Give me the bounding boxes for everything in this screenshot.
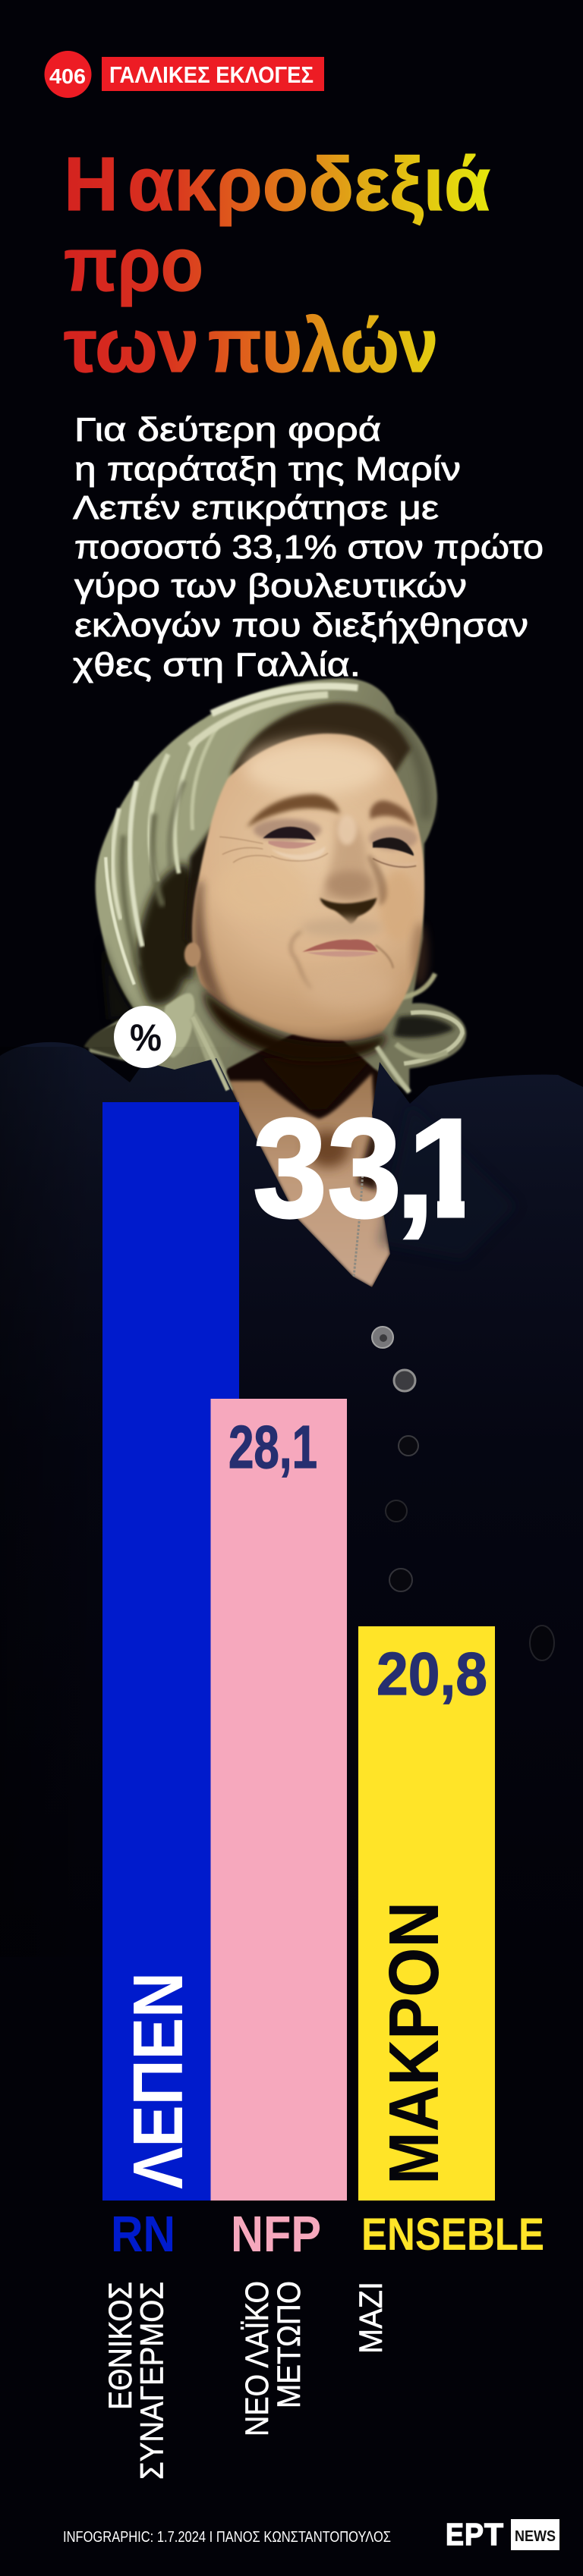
right eye — [373, 837, 414, 856]
ear — [184, 942, 200, 967]
bar: NFP: 28,1 — [228, 1413, 317, 1481]
footer credit: INFOGRAPHIC: 1.7.2024 Ι ΠΑΝΟΣ ΚΩΝΣΤΑΝΤΟΠΟΥΛΟΣ — [63, 2528, 391, 2546]
intro text: εκλογών που διεξήχθησαν — [74, 607, 528, 644]
chin light — [304, 964, 395, 1010]
party abbreviations: ENSEBLE — [361, 2209, 544, 2260]
left face shadow — [194, 881, 231, 1010]
logo: ERT news: Ρ — [465, 2517, 484, 2552]
header badge: issue number — [44, 51, 91, 98]
intro text: ποσοστό 33,1% στον πρώτο — [74, 529, 544, 566]
jaw shadow — [203, 990, 386, 1061]
value: 33,1 — [255, 1117, 465, 1239]
intro text: χθες στη Γαλλία. — [73, 646, 361, 683]
header badge: issue number: 406 — [49, 64, 86, 88]
right eyebrow — [370, 800, 414, 828]
value: 33,1: 33 — [253, 1090, 402, 1247]
intro text: Για δεύτερη φορά — [74, 411, 381, 448]
percent badge: % — [130, 1016, 162, 1059]
left eye socket — [254, 818, 321, 841]
right cheek — [380, 871, 418, 941]
title: των — [64, 303, 199, 388]
left eyebrow — [247, 794, 340, 828]
party full names: ΜΕΤΩΠΟ — [271, 2281, 307, 2408]
neck and chest skin — [216, 979, 395, 1290]
jacket — [0, 1042, 583, 2010]
party full names — [102, 2281, 389, 2480]
nose tip — [326, 871, 373, 898]
logo: ERT news: Ε — [446, 2517, 464, 2552]
hair mass — [84, 678, 466, 1092]
nose bridge and shadow — [320, 819, 378, 903]
title: πυλών — [208, 303, 438, 388]
logo: ERT news — [446, 2517, 559, 2552]
intro text: Λεπέν επικράτησε με — [73, 489, 439, 526]
nasolabial crease — [291, 931, 312, 988]
bar: Ensemble — [358, 1626, 495, 2201]
photo: Marine Le Pen portrait — [0, 678, 583, 2010]
bar: RN: ΛΕΠΕΝ — [118, 1972, 197, 2189]
face — [184, 734, 428, 1061]
party full names: ΝΕΟ ΛΑΪΚΟ — [239, 2281, 276, 2436]
value: 33,1: 1 — [408, 1090, 486, 1247]
party abbreviations: RN — [111, 2206, 175, 2263]
under-eye light — [271, 847, 326, 860]
title — [64, 142, 490, 388]
title: Η — [64, 142, 118, 227]
upper lip area — [301, 918, 383, 937]
logo: ERT news: Τ — [484, 2517, 503, 2552]
nostril shadow — [320, 898, 377, 924]
left cheek light — [214, 857, 307, 922]
hair and face, drawn in magnified coordinates — [84, 678, 466, 1092]
party full names: ΜΑΖΙ — [353, 2282, 389, 2354]
party abbreviations: NFP — [231, 2206, 321, 2263]
lips — [302, 940, 378, 952]
intro text — [73, 411, 544, 683]
header label: ΓΑΛΛΙΚΕΣ ΕΚΛΟΓΕΣ — [109, 61, 314, 88]
logo: ERT news: NEWS — [515, 2528, 556, 2545]
bar: NFP — [211, 1399, 347, 2201]
bar: RN — [102, 1102, 239, 2201]
right hair strands over jacket — [193, 1017, 447, 1092]
bar: Ensemble: 20,8 — [377, 1640, 487, 1707]
party full names: ΣΥΝΑΓΕΡΜΟΣ — [134, 2282, 170, 2480]
percent badge — [114, 1006, 176, 1068]
party abbreviations — [111, 2206, 544, 2263]
value: 33,1: , — [395, 1090, 435, 1247]
intro text: η παράταξη της Μαρίν — [74, 451, 461, 488]
forehead highlight — [244, 740, 385, 795]
party full names: ΕΘΝΙΚΟΣ — [102, 2282, 139, 2410]
intro text: γύρο των βουλευτικών — [74, 567, 467, 605]
bar: Ensemble: ΜΑΚΡΟΝ — [374, 1902, 453, 2185]
title: προ — [64, 222, 203, 307]
right eye socket — [369, 826, 418, 850]
smile corner — [376, 945, 393, 968]
forehead hairline shadow — [231, 702, 411, 776]
title: ακροδεξιά — [128, 142, 490, 227]
wrinkles — [219, 837, 328, 862]
left eye — [263, 827, 316, 840]
jacket buttons — [372, 1327, 554, 1660]
